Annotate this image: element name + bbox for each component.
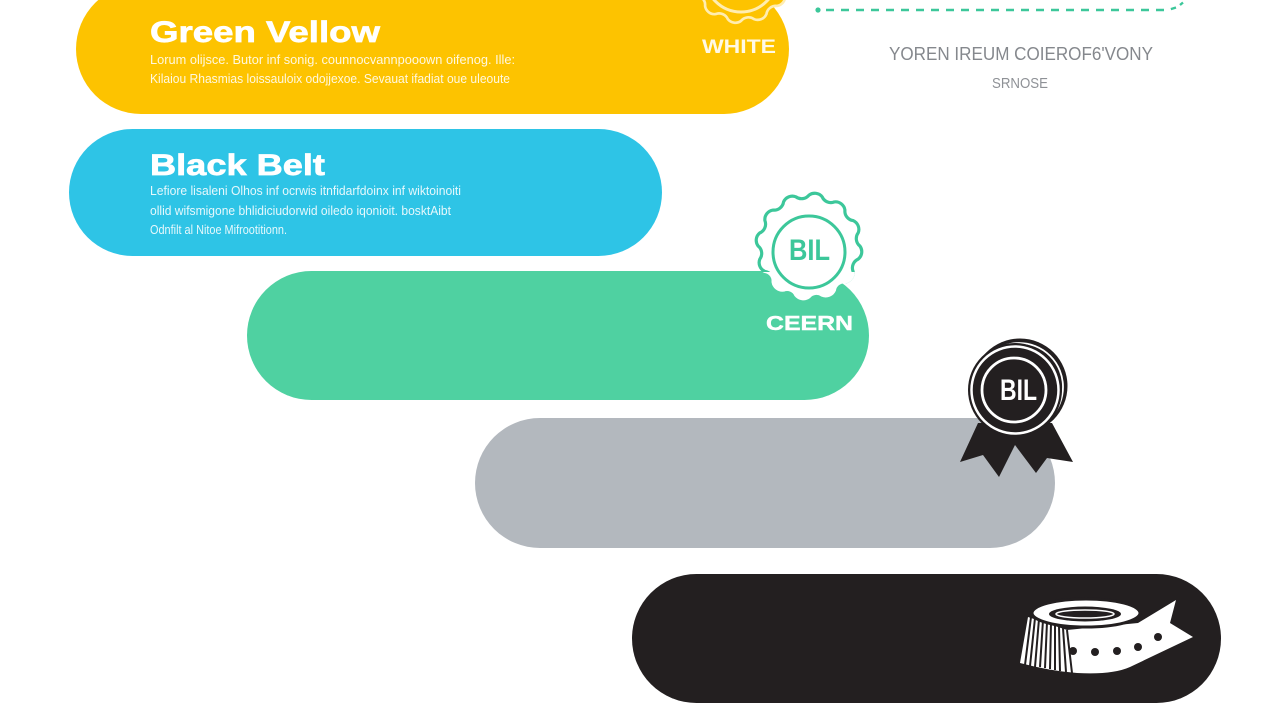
panel: yellow belt	[76, 0, 794, 114]
heading: Black Belt: Black Belt	[150, 149, 325, 182]
label: GREEN: CEERN	[766, 313, 853, 335]
panel: blue belt	[69, 129, 662, 256]
text block: blue description: ollid wifsmigone bhlidiciudorwid oiledo iqonioit. bosktAibt	[150, 203, 451, 218]
blue pill background	[69, 129, 662, 256]
panel: black belt	[632, 574, 1221, 703]
icon: black rosette badge	[960, 338, 1073, 477]
yellow pill background	[76, 0, 789, 114]
icon: green seal badge	[756, 193, 862, 299]
text block: yellow description: Kilaiou Rhasmias loissauloix odojjexoe. Sevauat ifadiat oue uleoute	[150, 71, 510, 86]
dashed connector line	[815, 2, 1183, 13]
text block: yellow description	[150, 52, 515, 86]
text block: yellow description: Lorum olijsce. Butor inf sonig. counnocvannpooown oifenog. Ille:	[150, 52, 515, 67]
heading: Green Yellow: Green Vellow	[150, 16, 381, 49]
icon: tape roll	[1020, 599, 1193, 673]
icon: white seal badge	[688, 0, 794, 23]
icon: green seal badge: BIL	[789, 234, 830, 267]
text block: grey caption: YOREN IREUM COIEROF6'VONY	[889, 44, 1153, 64]
icon: black rosette badge: BIL	[1000, 374, 1037, 407]
grey pill background	[475, 418, 1055, 548]
text block: blue description: Lefiore lisaleni Olhos inf ocrwis itnfidarfdoinx inf wiktoinoiti	[150, 183, 461, 198]
text block: grey caption: SRNOSE	[992, 75, 1048, 92]
panel: grey belt	[475, 338, 1073, 548]
black pill background	[632, 574, 1221, 703]
text block: blue description	[150, 183, 461, 237]
text block: blue description: Odnfilt al Nitoe Mifrootitionn.	[150, 222, 287, 237]
label: WHITE: WHITE	[702, 37, 776, 58]
green pill background	[247, 271, 869, 400]
panel: green belt	[247, 193, 869, 400]
text block: grey caption	[889, 44, 1153, 92]
